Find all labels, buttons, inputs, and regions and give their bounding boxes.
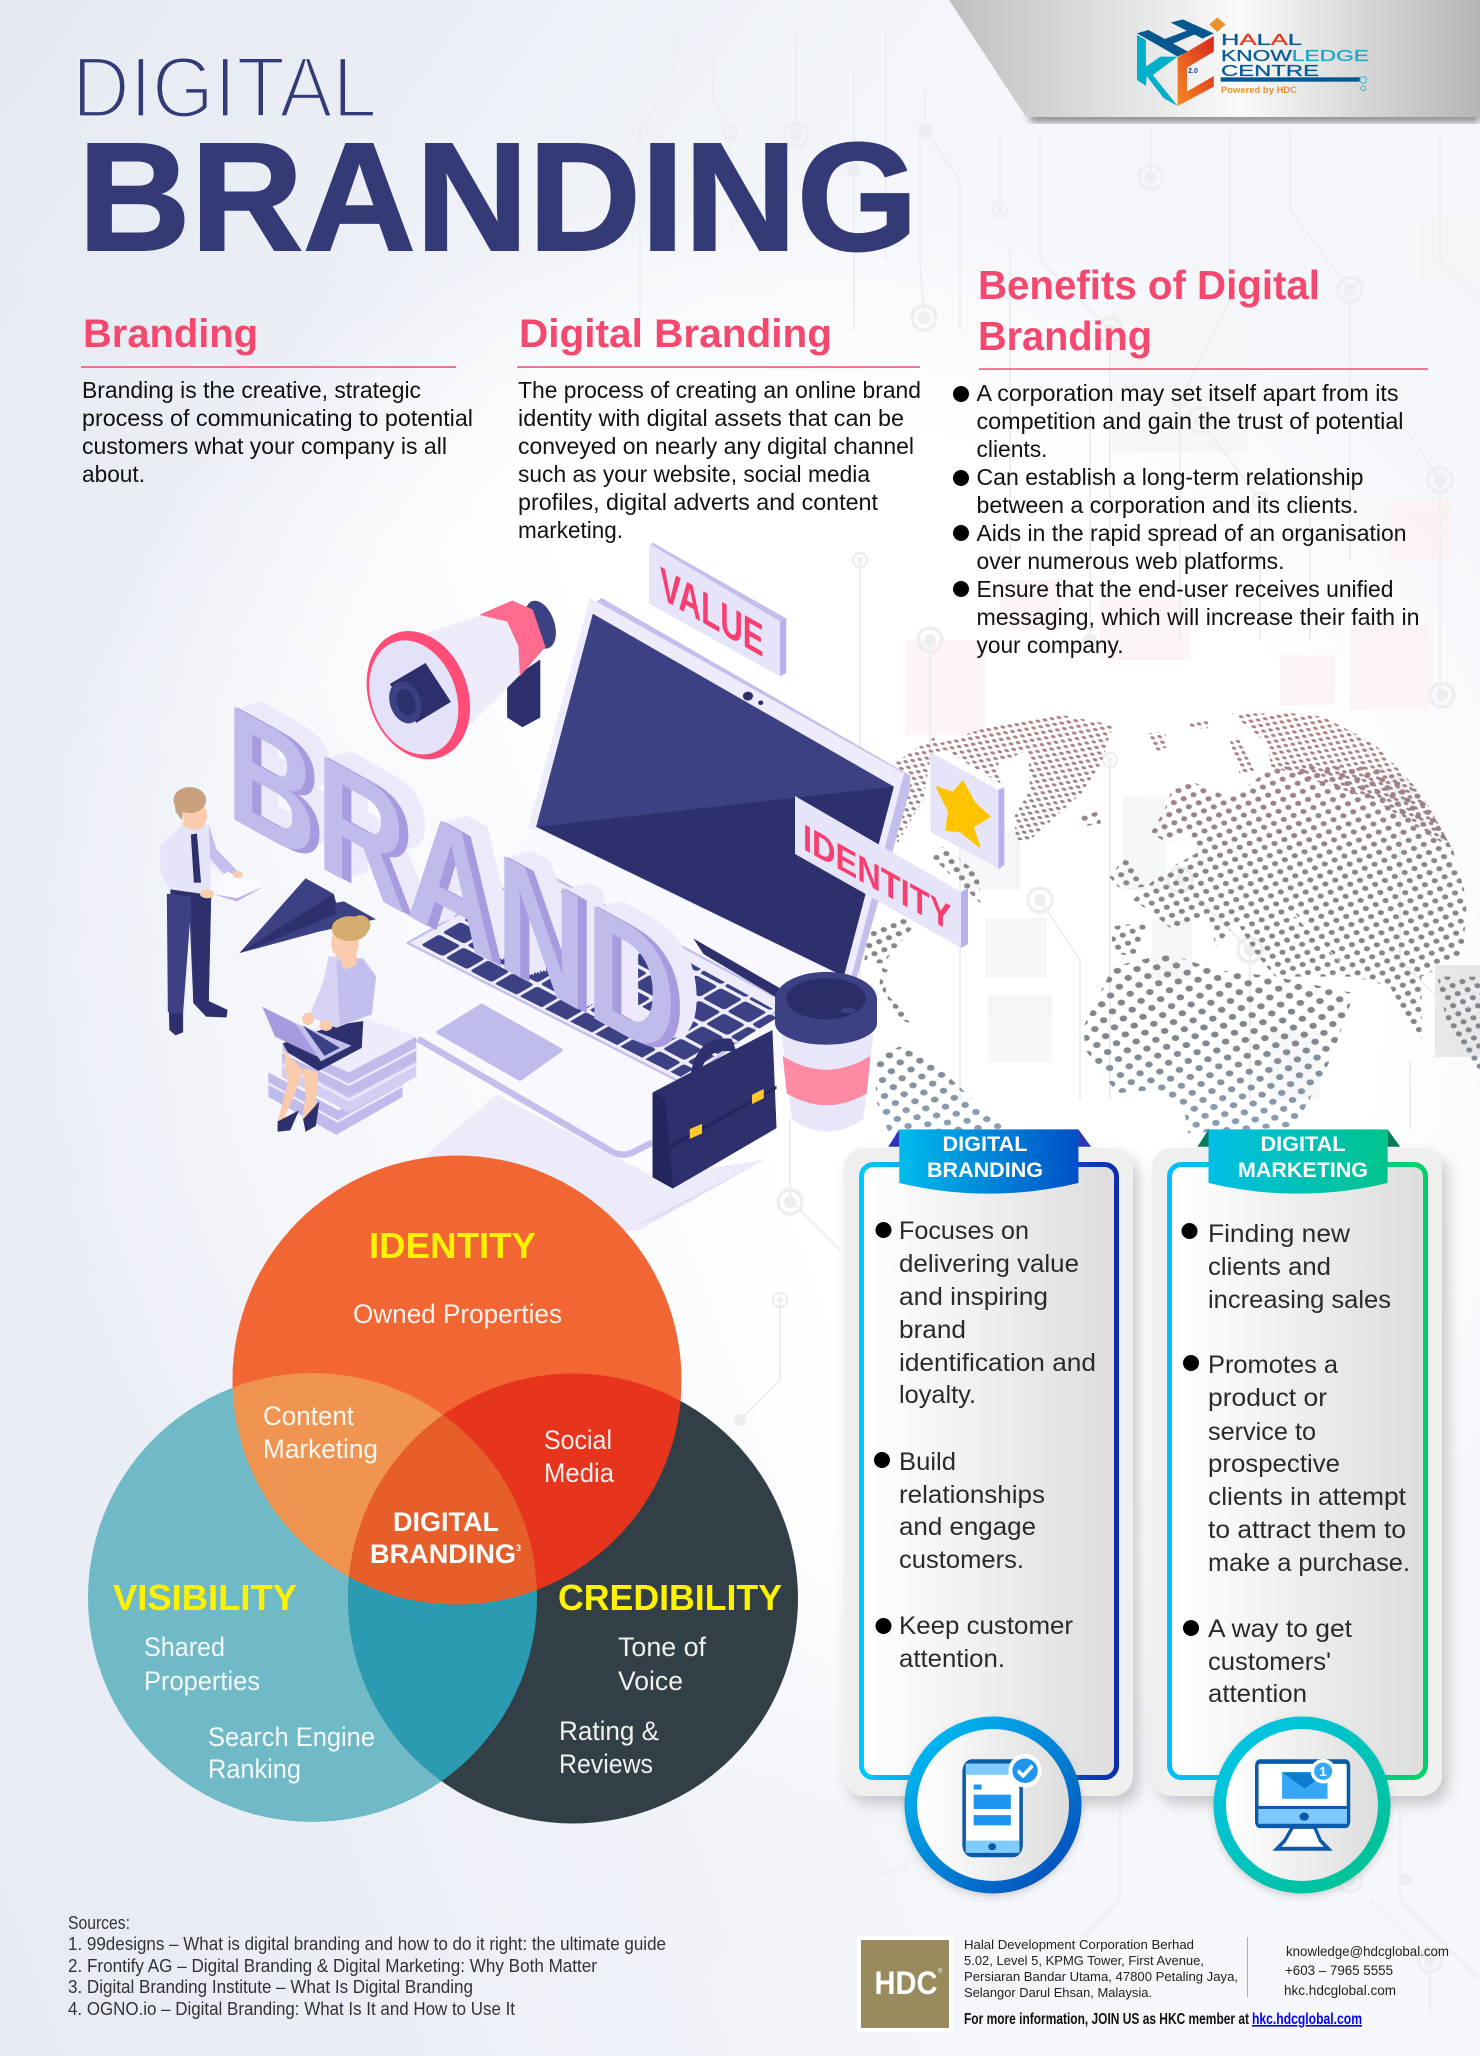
call to action: hkc.hdcglobal.com: [1252, 2011, 1362, 2028]
man with clipboard: [160, 787, 265, 1035]
sources: 3. Digital Branding Institute – What Is Digital Branding: [68, 1977, 473, 1997]
text block: branding definition: process of communicating to potential: [82, 405, 473, 431]
woman with laptop on books: [262, 915, 416, 1135]
bullet list: digital branding: and engage: [899, 1513, 1036, 1541]
laptop screen: [528, 598, 910, 999]
bullet list: digital marketing: prospective: [1208, 1450, 1340, 1478]
logo: Halal Knowledge Centre: Powered by HDC: [1221, 85, 1298, 95]
text block: branding definition: [82, 377, 473, 487]
top-right logo banner: [949, 0, 1480, 122]
value sign: [649, 542, 786, 676]
heading: Benefits of Digital Branding: [978, 262, 1320, 359]
heading: Benefits of Digital Branding: Branding: [978, 313, 1152, 359]
HDC logo: HDC: [874, 1965, 938, 2001]
bullet list: digital branding: [874, 1217, 1096, 1673]
venn label: content marketing: Content: [263, 1401, 354, 1431]
laptop base: [374, 827, 846, 1155]
bullet list: benefits: Can establish a long-term relationship: [976, 464, 1364, 490]
identity sign: IDENTITY: [803, 815, 952, 940]
3D word BRAND: BRAND: [234, 666, 684, 1098]
column: Benefits of Digital Branding: [953, 262, 1428, 658]
sources: [68, 1913, 666, 2019]
bullet list: benefits: Aids in the rapid spread of an organisation: [976, 520, 1406, 546]
3D word BRAND: BRAND: [232, 669, 682, 1101]
text block: digital branding definition: The process of creating an online brand: [518, 377, 921, 403]
3D word BRAND: BRAND: [237, 664, 687, 1097]
megaphone: [352, 598, 561, 769]
logo: Halal Knowledge Centre: 2.0: [1188, 68, 1198, 75]
venn label: identity: IDENTITY: [369, 1225, 536, 1266]
bullet list: digital branding: Keep customer: [899, 1612, 1073, 1640]
venn label: visibility: VISIBILITY: [113, 1577, 297, 1618]
address: Selangor Darul Ehsan, Malaysia.: [964, 1985, 1152, 2000]
venn label: social media: [544, 1425, 615, 1488]
text block: digital branding definition: [518, 377, 921, 543]
text block: branding definition: about.: [82, 461, 145, 487]
bullet list: digital branding: and inspiring: [899, 1283, 1048, 1311]
venn label: credibility: Reviews: [559, 1749, 653, 1779]
venn label: credibility: CREDIBILITY: [558, 1577, 782, 1618]
contact details: +603 – 7965 5555: [1285, 1963, 1393, 1978]
footer contact block: [857, 1936, 1449, 2032]
bullet list: digital marketing: clients in attempt: [1208, 1483, 1406, 1511]
bullet list: digital marketing: product or: [1208, 1384, 1327, 1412]
venn label: credibility: Voice: [618, 1666, 683, 1696]
bullet list: digital marketing: make a purchase.: [1208, 1549, 1410, 1577]
bullet list: benefits: Ensure that the end-user receives unified: [976, 576, 1394, 602]
banner: digital marketing: [1197, 1129, 1400, 1194]
venn label: visibility: [113, 1577, 375, 1784]
bullet list: benefits: messaging, which will increase their faith in: [976, 604, 1420, 630]
venn label: digital branding: 3: [516, 1543, 521, 1553]
banner: digital branding: BRANDING: [927, 1158, 1043, 1182]
heading: Benefits of Digital Branding: Benefits of Digital: [978, 262, 1320, 308]
venn label: identity: [353, 1225, 562, 1329]
bullet list: digital branding: loyalty.: [899, 1381, 976, 1409]
venn label: visibility: Ranking: [208, 1754, 301, 1784]
briefcase and coffee cup: [653, 972, 877, 1188]
banner: digital marketing: MARKETING: [1238, 1158, 1368, 1182]
text block: branding definition: Branding is the creative, strategic: [82, 377, 421, 403]
star sign: [930, 752, 1004, 869]
text block: branding definition: customers what your company is all: [82, 433, 447, 459]
heading: Digital Branding: Digital Branding: [519, 312, 832, 356]
bullet list: digital marketing: clients and: [1208, 1253, 1331, 1281]
bullet list: digital marketing: [1182, 1220, 1410, 1708]
icon: desktop monitor with mail: [1214, 1716, 1390, 1896]
bullet list: digital marketing: customers': [1208, 1648, 1331, 1676]
3D word BRAND: BRAND: [240, 664, 690, 1097]
title: Digital: DIGITAL: [72, 40, 377, 136]
sources: 1. 99designs – What is digital branding and how to do it right: the ultimate guide: [68, 1934, 666, 1954]
venn label: credibility: [558, 1577, 782, 1779]
sources: 2. Frontify AG – Digital Branding & Digital Marketing: Why Both Matter: [68, 1956, 597, 1976]
bullet list: benefits: your company.: [976, 632, 1124, 658]
3D word BRAND: BRAND: [235, 671, 685, 1103]
bullet list: benefits: [953, 380, 1420, 658]
illustration foreground: signs, cup, briefcase: [649, 542, 1004, 1188]
text block: digital branding definition: conveyed on nearly any digital channel: [518, 433, 914, 459]
venn label: credibility: Rating &: [559, 1716, 659, 1746]
call to action: For more information, JOIN US as HKC member at: [964, 2011, 1250, 2028]
paper plane: [239, 878, 376, 953]
column: Digital Branding: [517, 312, 921, 543]
text block: digital branding definition: identity with digital assets that can be: [518, 405, 904, 431]
venn label: social media: Media: [544, 1458, 615, 1488]
3D word BRAND: BRAND: [246, 662, 696, 1095]
bullet list: benefits: competition and gain the trust of potential: [976, 408, 1404, 434]
HDC logo: [857, 1936, 953, 2032]
contact details: knowledge@hdcglobal.com: [1286, 1944, 1449, 1959]
bullet list: digital marketing: attention: [1208, 1680, 1307, 1708]
bullet list: benefits: over numerous web platforms.: [976, 548, 1284, 574]
text block: digital branding definition: profiles, digital adverts and content: [518, 489, 878, 515]
isometric illustration: laptop, keyboard, megaphone: [160, 598, 910, 1244]
text block: digital branding definition: such as your website, social media: [518, 461, 871, 487]
briefcase: [653, 1030, 777, 1188]
bullet list: digital marketing: service to: [1208, 1418, 1316, 1446]
venn label: visibility: Search Engine: [208, 1722, 375, 1752]
bullet list: digital branding: relationships: [899, 1481, 1045, 1509]
HDC logo: ®: [938, 1968, 943, 1975]
bullet list: digital marketing: Promotes a: [1208, 1351, 1338, 1379]
sources: 4. OGNO.io – Digital Branding: What Is It and How to Use It: [68, 1999, 515, 2019]
venn label: visibility: Shared: [144, 1632, 225, 1662]
column: Branding: [81, 312, 473, 487]
address: Halal Development Corporation Berhad: [964, 1937, 1194, 1952]
venn label: identity: Owned Properties: [353, 1299, 562, 1329]
venn label: digital branding: DIGITAL: [393, 1507, 499, 1537]
heading: Branding: Branding: [83, 312, 258, 356]
panel: digital branding: [844, 1129, 1139, 1896]
3D word BRAND: BRAND: [229, 667, 679, 1100]
bullet list: digital marketing: increasing sales: [1208, 1286, 1391, 1314]
keyboard: [418, 878, 783, 1077]
bullet list: digital branding: delivering value: [899, 1250, 1079, 1278]
venn label: content marketing: Marketing: [263, 1434, 378, 1464]
venn label: social media: Social: [544, 1425, 612, 1455]
3D word BRAND: BRAND: [252, 661, 702, 1093]
bullet list: digital marketing: A way to get: [1208, 1615, 1352, 1643]
bullet list: benefits: between a corporation and its clients.: [976, 492, 1358, 518]
contact details: hkc.hdcglobal.com: [1284, 1983, 1396, 1998]
venn diagram: [88, 1156, 798, 1824]
venn label: content marketing: [263, 1401, 378, 1464]
icon: desktop monitor with mail: 1: [1319, 1764, 1327, 1779]
address: Persiaran Bandar Utama, 47800 Petaling Jaya,: [964, 1969, 1238, 1984]
bullet list: digital branding: customers.: [899, 1546, 1024, 1574]
venn label: digital branding: BRANDING: [370, 1539, 516, 1569]
laptop shadow: [426, 1095, 765, 1244]
address: [964, 1937, 1238, 2000]
world map dotted globe: [860, 700, 1480, 1167]
bullet list: digital branding: Build: [899, 1448, 956, 1476]
bullet list: digital marketing: to attract them to: [1208, 1516, 1406, 1544]
logo: Halal Knowledge Centre: [1137, 17, 1369, 106]
coffee cup: [775, 972, 877, 1132]
venn label: credibility: Tone of: [618, 1632, 706, 1662]
bullet list: benefits: A corporation may set itself apart from its: [976, 380, 1398, 406]
panel: digital marketing: [1152, 1129, 1448, 1896]
bullet list: digital branding: identification and: [899, 1349, 1096, 1377]
bullet list: digital branding: attention.: [899, 1645, 1005, 1673]
logo: Halal Knowledge Centre: CENTRE: [1221, 63, 1319, 80]
banner: digital branding: [888, 1129, 1091, 1194]
bullet list: benefits: clients.: [976, 436, 1048, 462]
text block: digital branding definition: marketing.: [518, 517, 623, 543]
3D word BRAND: BRAND: [226, 667, 676, 1099]
contact details: [1284, 1944, 1449, 1998]
bullet list: digital branding: brand: [899, 1316, 966, 1344]
bullet list: digital marketing: Finding new: [1208, 1220, 1351, 1248]
bullet list: digital branding: Focuses on: [899, 1217, 1029, 1245]
venn label: visibility: Properties: [144, 1666, 260, 1696]
logo: Halal Knowledge Centre: KNOW LEDGE: [1221, 48, 1369, 65]
3D word BRAND: BRAND: [243, 663, 693, 1095]
banner: digital branding: DIGITAL: [942, 1132, 1028, 1156]
3D word BRAND: BRAND: [249, 661, 699, 1094]
value sign: VALUE: [660, 557, 764, 667]
address: 5.02, Level 5, KPMG Tower, First Avenue,: [964, 1953, 1204, 1968]
trackpad: [438, 1005, 561, 1079]
logo: Halal Knowledge Centre: H A L A L: [1221, 32, 1302, 49]
banner: digital marketing: DIGITAL: [1260, 1132, 1346, 1156]
venn label: digital branding: [370, 1507, 521, 1569]
sources: Sources:: [68, 1913, 130, 1933]
icon: phone with check badge: [904, 1716, 1082, 1896]
title: Branding: BRANDING: [78, 111, 918, 283]
